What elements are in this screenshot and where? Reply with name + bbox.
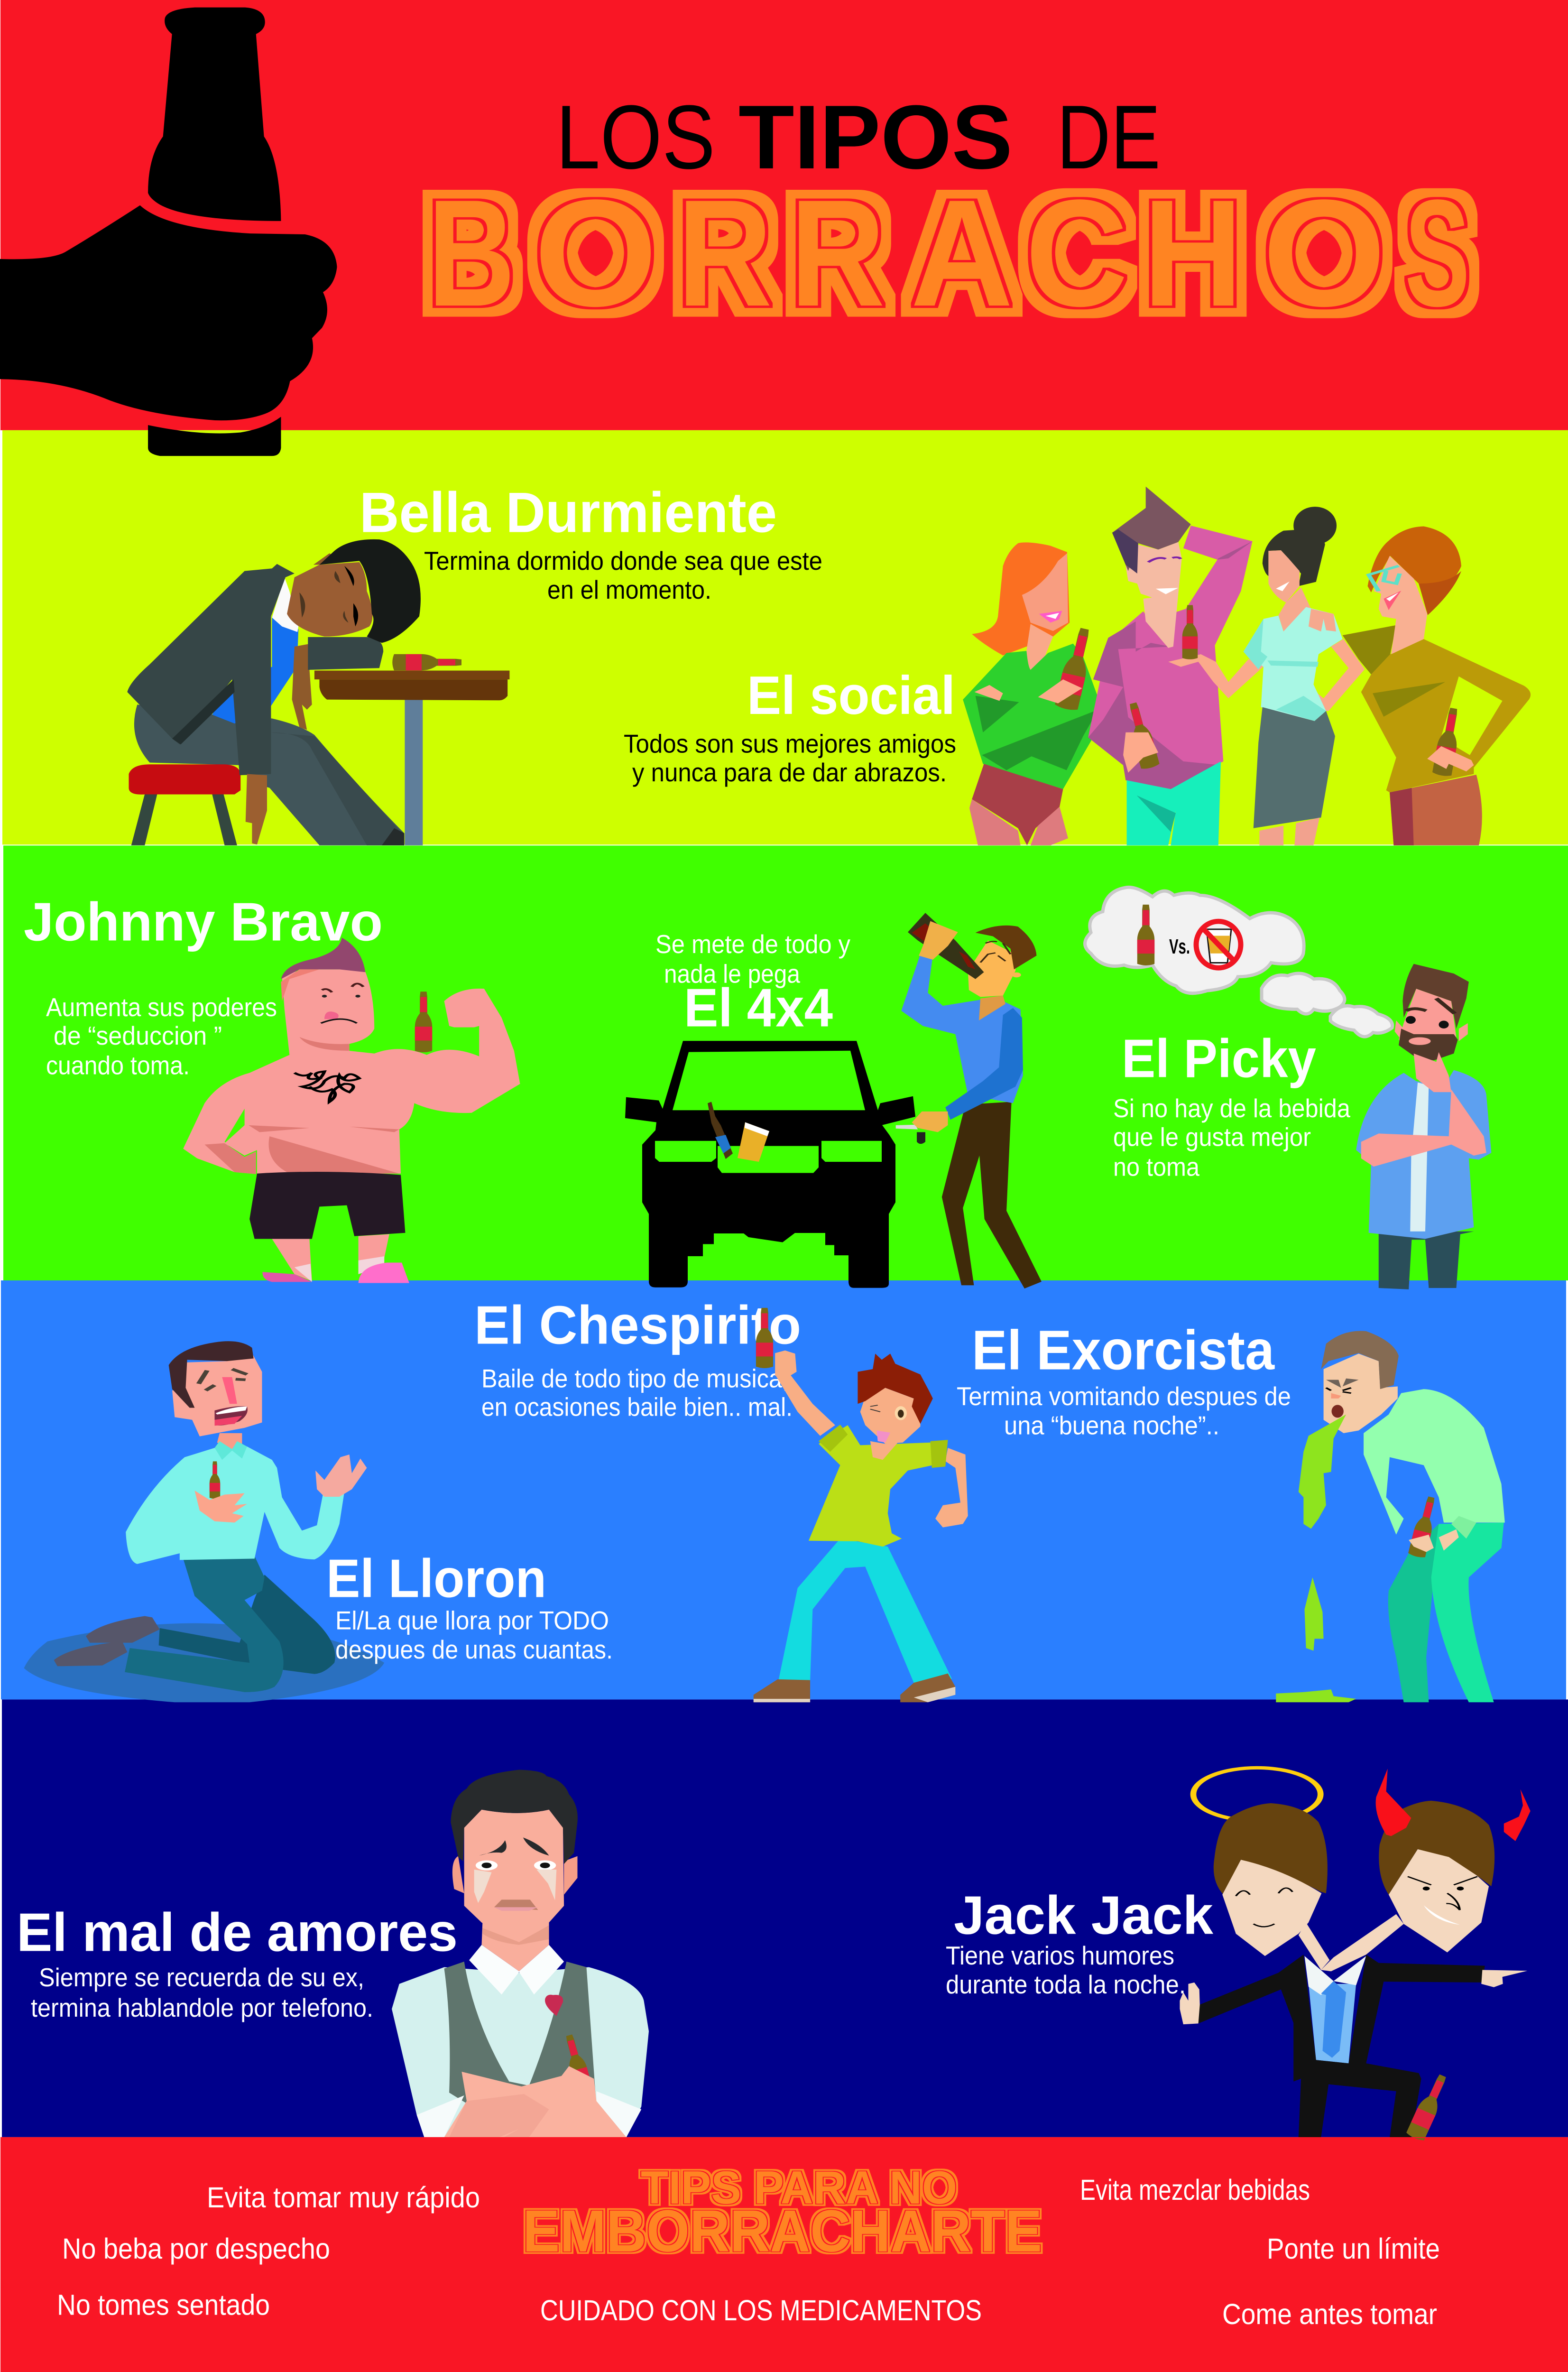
heading: Jack Jack: Jack Jack xyxy=(954,1885,1213,1946)
text: El Picky description xyxy=(1113,1093,1350,1181)
panel: yellow band xyxy=(127,481,1531,845)
heading: tips para no: TIPS PARA NO xyxy=(641,2161,957,2214)
tip: Ponte un límite: Ponte un límite xyxy=(1267,2233,1440,2265)
title: los tipos de: TIPOS xyxy=(738,86,1013,187)
title: borrachos: O xyxy=(534,168,657,338)
tip: Cuidado con los medicamentos: CUIDADO CON LOS MEDICAMENTOS xyxy=(540,2295,982,2327)
label: Vs.: Vs. xyxy=(1169,936,1190,958)
text: El Chespirito description xyxy=(481,1364,793,1421)
panel: tips footer xyxy=(0,2137,1568,2331)
text: Bella Durmiente description xyxy=(424,546,822,604)
heading: Johnny Bravo: Johnny Bravo xyxy=(24,892,383,952)
illustration: vomiting man xyxy=(1276,1331,1505,1702)
icon: bottle xyxy=(210,1461,220,1499)
text: El 4x4 description xyxy=(655,929,850,988)
illustration: two-faced man xyxy=(1180,1768,1531,2137)
illustration: group of four friends xyxy=(963,487,1531,845)
text: Johnny Bravo description: de “seduccion ” xyxy=(54,1021,222,1050)
text: El social description: y nunca para de dar abrazos. xyxy=(632,758,947,787)
text: Jack Jack description: Tiene varios humores xyxy=(946,1941,1174,1970)
tip: No tomes sentado: No tomes sentado xyxy=(57,2289,270,2321)
text: El 4x4 description: nada le pega xyxy=(664,959,800,988)
icon: bottle and beer on hood xyxy=(708,1102,769,1162)
heading: El Picky: El Picky xyxy=(1122,1029,1316,1089)
hands over bottles xyxy=(1038,679,1474,773)
illustration: thinking bearded man xyxy=(1356,964,1491,1289)
text: El Lloron description xyxy=(335,1606,613,1664)
text: Johnny Bravo description: Aumenta sus poderes xyxy=(46,993,277,1022)
title: borrachos: H xyxy=(1143,168,1243,338)
text: El Chespirito description: en ocasiones baile bien.. mal. xyxy=(481,1392,793,1421)
red hair woman with glasses xyxy=(1343,527,1531,845)
icon: bottles held by friends xyxy=(1054,605,1463,777)
title: los tipos de: LOS xyxy=(556,86,715,187)
text: El Lloron description: despues de unas cuantas. xyxy=(335,1635,613,1664)
panel: green band xyxy=(24,887,1491,1289)
heading: El Lloron: El Lloron xyxy=(326,1549,546,1609)
text: Bella Durmiente description: en el momento. xyxy=(547,575,711,604)
heading: El Exorcista: El Exorcista xyxy=(972,1319,1275,1381)
illustration: muscle man xyxy=(183,938,520,1283)
icon: bottle xyxy=(561,2033,593,2096)
tip: Evita tomar muy rápido: Evita tomar muy rápido xyxy=(207,2181,480,2214)
icon: bottle xyxy=(415,991,432,1052)
text: Johnny Bravo description xyxy=(46,993,277,1080)
icon: bottle in thought xyxy=(1137,905,1154,965)
title: borrachos: O xyxy=(1263,168,1386,338)
icon: bottle xyxy=(1406,2072,1452,2142)
text: El mal de amores description: termina hablandole por telefono. xyxy=(31,1993,373,2022)
icon: prohibited beer glass xyxy=(1196,921,1241,968)
text: El mal de amores description: Siempre se recuerda de su ex, xyxy=(39,1963,364,1992)
text: El social description xyxy=(624,729,956,787)
title: borrachos: R xyxy=(677,168,772,338)
crossed arms xyxy=(417,2066,641,2137)
illustration: heartbroken man xyxy=(392,1770,649,2137)
heading: El Chespirito: El Chespirito xyxy=(474,1295,801,1355)
title: borrachos: A xyxy=(911,168,1013,338)
text: Jack Jack description xyxy=(946,1941,1186,1999)
illustration: dancing man xyxy=(754,1353,968,1702)
tip: Come antes tomar: Come antes tomar xyxy=(1222,2298,1437,2331)
text: El 4x4 description: Se mete de todo y xyxy=(655,929,850,959)
tip: No beba por despecho: No beba por despecho xyxy=(62,2233,330,2265)
text: El Exorcista description: Termina vomitando despues de xyxy=(957,1381,1291,1411)
text: El mal de amores description xyxy=(31,1963,373,2022)
woman with bun xyxy=(1168,507,1365,845)
heading: emborracharte: EMBORRACHARTE xyxy=(523,2197,1042,2264)
title: borrachos: S xyxy=(1405,168,1470,338)
raised hand xyxy=(775,1351,797,1376)
icon: black jeep xyxy=(625,1041,915,1288)
title: borrachos xyxy=(428,168,1470,338)
text: Jack Jack description: durante toda la noche. xyxy=(946,1970,1186,1999)
hand on bottle xyxy=(1409,1529,1459,1552)
heading: El mal de amores: El mal de amores xyxy=(17,1903,458,1963)
illustration: man drinking from bottle xyxy=(896,913,1042,1288)
tip: Evita mezclar bebidas: Evita mezclar bebidas xyxy=(1080,2174,1310,2206)
panel: navy band xyxy=(17,1768,1531,2142)
illustration: sleeping man at table xyxy=(127,539,509,845)
icon: bottle on table xyxy=(392,654,461,670)
icon: bottle xyxy=(1408,1495,1440,1558)
icon: hand holding bottle xyxy=(0,8,337,456)
text: El Picky description: no toma xyxy=(1113,1152,1199,1181)
heading: El 4x4: El 4x4 xyxy=(684,978,833,1038)
text: El Picky description: Si no hay de la bebida xyxy=(1113,1093,1350,1123)
title: borrachos: B xyxy=(428,168,515,338)
text: El Exorcista description: una “buena noche”.. xyxy=(1004,1411,1219,1440)
panel: blue band xyxy=(24,1295,1505,1702)
illustration: thought clouds xyxy=(1085,887,1393,1037)
text: Bella Durmiente description: Termina dormido donde sea que este xyxy=(424,546,822,575)
text: El Picky description: que le gusta mejor xyxy=(1113,1122,1311,1152)
title: los tipos de: DE xyxy=(1057,86,1161,187)
header panel xyxy=(0,8,1470,456)
text: Johnny Bravo description: cuando toma. xyxy=(46,1051,190,1080)
title: borrachos: R xyxy=(790,168,885,338)
text: El Lloron description: El/La que llora por TODO xyxy=(335,1606,609,1635)
man with raised arm xyxy=(1088,487,1253,845)
title: borrachos: C xyxy=(1025,168,1128,338)
illustration: crying kneeling man xyxy=(24,1341,384,1702)
hand on chest xyxy=(194,1491,247,1523)
text: El Exorcista description xyxy=(957,1381,1291,1440)
text: El social description: Todos son sus mejores amigos xyxy=(624,729,956,758)
icon: bottle xyxy=(756,1308,773,1368)
heading: Bella Durmiente: Bella Durmiente xyxy=(360,481,777,544)
orange hair woman xyxy=(963,542,1101,845)
heading: El social: El social xyxy=(747,666,955,726)
text: El Chespirito description: Baile de todo tipo de musica, xyxy=(481,1364,789,1393)
